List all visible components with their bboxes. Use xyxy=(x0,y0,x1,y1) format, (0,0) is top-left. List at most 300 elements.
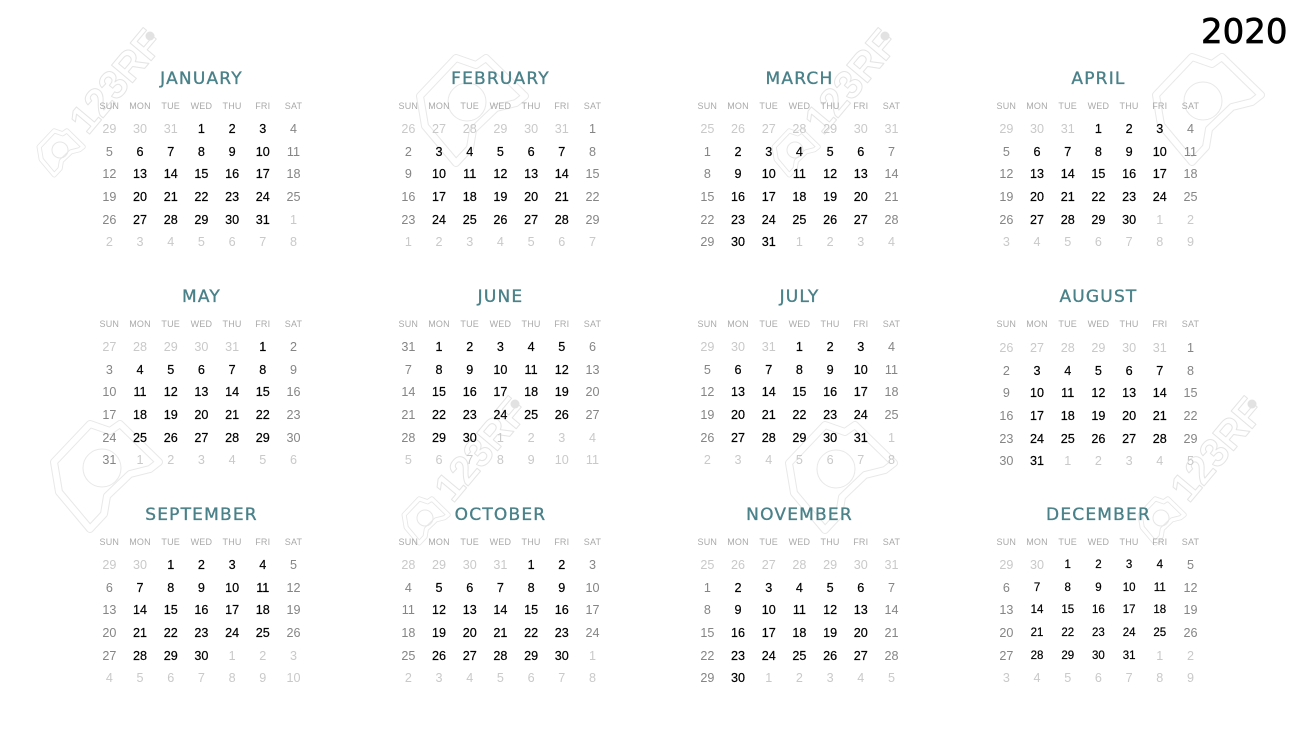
date grid: 2 xyxy=(827,340,834,354)
heading: december: DECEMBER xyxy=(1046,505,1151,525)
date grid: 29 xyxy=(700,340,714,354)
date grid: 2 xyxy=(1003,364,1010,378)
date grid: 5 xyxy=(1187,558,1194,572)
date grid: 7 xyxy=(259,235,266,249)
weekday labels xyxy=(698,319,900,329)
weekday labels: SAT xyxy=(285,101,302,111)
date grid: 10 xyxy=(432,167,446,181)
panel: may xyxy=(100,287,302,467)
date grid: 13 xyxy=(102,603,116,617)
date grid: 4 xyxy=(589,431,596,445)
weekday labels: SUN xyxy=(997,537,1016,547)
date grid: 2 xyxy=(259,649,266,663)
date grid: 6 xyxy=(198,363,205,377)
date grid: 30 xyxy=(225,213,239,227)
date grid: 31 xyxy=(493,558,507,572)
weekday labels: SAT xyxy=(883,319,900,329)
weekday labels: FRI xyxy=(1152,319,1167,329)
date grid: 5 xyxy=(704,363,711,377)
date grid: 31 xyxy=(762,235,776,249)
date grid: 25 xyxy=(792,213,806,227)
date grid: 29 xyxy=(1091,213,1105,227)
date grid: 16 xyxy=(225,167,239,181)
date grid: 27 xyxy=(854,213,868,227)
date grid: 16 xyxy=(1092,604,1105,616)
date grid: 7 xyxy=(1126,671,1133,685)
weekday labels: THU xyxy=(223,319,242,329)
date grid: 16 xyxy=(731,626,745,640)
date grid: 6 xyxy=(466,581,473,595)
weekday labels: TUE xyxy=(460,319,479,329)
date grid: 7 xyxy=(1064,145,1071,159)
weekday labels: MON xyxy=(1026,319,1048,329)
date grid: 8 xyxy=(198,145,205,159)
date grid: 31 xyxy=(884,558,898,572)
date grid: 9 xyxy=(735,603,742,617)
date grid: 4 xyxy=(167,235,174,249)
date grid xyxy=(999,558,1197,685)
date grid: 8 xyxy=(704,167,711,181)
date grid: 26 xyxy=(823,649,837,663)
date grid: 8 xyxy=(589,145,596,159)
date grid: 2 xyxy=(290,340,297,354)
date grid: 26 xyxy=(432,649,446,663)
date grid: 8 xyxy=(436,363,443,377)
weekday labels: WED xyxy=(191,101,212,111)
date grid: 1 xyxy=(528,558,535,572)
date grid: 8 xyxy=(259,363,266,377)
date grid: 30 xyxy=(1122,341,1136,355)
date grid: 6 xyxy=(558,235,565,249)
date grid: 2 xyxy=(827,235,834,249)
date grid: 5 xyxy=(1187,454,1194,468)
date grid: 23 xyxy=(286,408,300,422)
date grid: 27 xyxy=(1030,213,1044,227)
date grid xyxy=(401,340,599,467)
date grid xyxy=(102,340,300,467)
date grid: 4 xyxy=(137,363,144,377)
weekday labels: SAT xyxy=(584,537,601,547)
date grid: 24 xyxy=(225,626,239,640)
weekday labels: THU xyxy=(1120,319,1139,329)
panel: june xyxy=(399,287,601,467)
date grid: 13 xyxy=(1030,167,1044,181)
date grid: 8 xyxy=(796,363,803,377)
weekday labels: SAT xyxy=(584,319,601,329)
date grid: 2 xyxy=(735,581,742,595)
date grid: 6 xyxy=(589,340,596,354)
date grid: 29 xyxy=(1061,650,1074,662)
date grid: 17 xyxy=(1123,604,1135,616)
date grid: 5 xyxy=(290,558,297,572)
date grid: 13 xyxy=(731,385,745,399)
date grid: 21 xyxy=(762,408,776,422)
weekday labels xyxy=(100,319,302,329)
date grid: 4 xyxy=(796,145,803,159)
weekday labels: MON xyxy=(129,319,151,329)
panel: march xyxy=(698,69,900,249)
date grid: 8 xyxy=(589,671,596,685)
heading: july: JULY xyxy=(780,287,819,307)
date grid: 15 xyxy=(524,603,538,617)
date grid: 18 xyxy=(1183,167,1197,181)
date grid: 20 xyxy=(194,408,208,422)
date grid: 22 xyxy=(256,408,270,422)
date grid: 30 xyxy=(1122,213,1136,227)
weekday labels: FRI xyxy=(554,319,569,329)
weekday labels: WED xyxy=(191,319,212,329)
panel: july xyxy=(698,287,900,467)
date grid: 3 xyxy=(137,235,144,249)
date grid: 24 xyxy=(1153,190,1167,204)
date grid: 30 xyxy=(823,431,837,445)
date grid: 8 xyxy=(229,671,236,685)
date grid: 29 xyxy=(256,431,270,445)
date grid: 9 xyxy=(466,363,473,377)
date grid: 17 xyxy=(854,385,868,399)
date grid: 9 xyxy=(290,363,297,377)
date grid: 7 xyxy=(137,581,144,595)
weekday labels: THU xyxy=(1120,101,1139,111)
date grid xyxy=(700,122,898,249)
date grid: 20 xyxy=(1122,409,1136,423)
weekday labels: THU xyxy=(223,537,242,547)
weekday labels: MON xyxy=(727,537,749,547)
date grid: 2 xyxy=(436,235,443,249)
date grid: 4 xyxy=(106,671,113,685)
date grid: 15 xyxy=(256,385,270,399)
weekday labels: TUE xyxy=(460,101,479,111)
date grid: 13 xyxy=(585,363,599,377)
date grid: 3 xyxy=(106,363,113,377)
date grid: 1 xyxy=(497,431,504,445)
date grid: 10 xyxy=(762,167,776,181)
date grid: 6 xyxy=(1034,145,1041,159)
heading: september: SEPTEMBER xyxy=(145,505,258,525)
date grid: 5 xyxy=(1095,364,1102,378)
date grid: 18 xyxy=(1153,604,1166,616)
date grid: 1 xyxy=(1187,341,1194,355)
date grid: 1 xyxy=(229,649,236,663)
date grid: 28 xyxy=(1031,650,1043,662)
date grid: 30 xyxy=(1030,558,1044,572)
date grid: 29 xyxy=(524,649,538,663)
date grid: 11 xyxy=(287,145,300,159)
weekday labels: WED xyxy=(490,537,511,547)
weekday labels: TUE xyxy=(460,537,479,547)
date grid: 1 xyxy=(796,235,803,249)
date grid: 26 xyxy=(1091,432,1105,446)
date grid: 23 xyxy=(731,213,745,227)
date grid: 3 xyxy=(735,453,742,467)
date grid xyxy=(999,341,1197,468)
date grid: 17 xyxy=(585,603,599,617)
date grid: 7 xyxy=(405,363,412,377)
date grid: 31 xyxy=(854,431,868,445)
weekday labels: SUN xyxy=(100,537,119,547)
date grid: 2 xyxy=(558,558,565,572)
date grid: 5 xyxy=(497,671,504,685)
date grid: 27 xyxy=(762,122,776,136)
date grid: 23 xyxy=(194,626,208,640)
date grid: 21 xyxy=(225,408,239,422)
date grid: 11 xyxy=(586,453,599,467)
weekday labels: WED xyxy=(1088,537,1109,547)
date grid: 3 xyxy=(436,145,443,159)
weekday labels: TUE xyxy=(161,537,180,547)
date grid: 25 xyxy=(463,213,477,227)
date grid: 28 xyxy=(792,122,806,136)
date grid: 28 xyxy=(493,649,507,663)
date grid: 13 xyxy=(133,167,147,181)
date grid: 27 xyxy=(194,431,208,445)
date grid: 31 xyxy=(1123,650,1135,662)
date grid: 9 xyxy=(229,145,236,159)
year title: 2020 xyxy=(1201,12,1288,52)
weekday labels: SUN xyxy=(399,101,418,111)
date grid: 14 xyxy=(225,385,239,399)
date grid: 30 xyxy=(854,122,868,136)
date grid: 29 xyxy=(700,235,714,249)
weekday labels: SAT xyxy=(1182,101,1199,111)
date grid: 31 xyxy=(1061,122,1075,136)
weekday labels: FRI xyxy=(554,537,569,547)
date grid: 3 xyxy=(765,145,772,159)
date grid: 12 xyxy=(999,167,1013,181)
date grid: 5 xyxy=(405,453,412,467)
date grid: 28 xyxy=(1061,341,1075,355)
date grid: 8 xyxy=(1156,671,1163,685)
date grid: 27 xyxy=(524,213,538,227)
date grid: 1 xyxy=(259,340,266,354)
date grid: 23 xyxy=(999,432,1013,446)
date grid: 9 xyxy=(558,581,565,595)
date grid: 19 xyxy=(164,408,178,422)
date grid: 5 xyxy=(497,145,504,159)
date grid: 17 xyxy=(762,626,776,640)
weekday labels: MON xyxy=(1026,537,1048,547)
date grid: 28 xyxy=(133,649,147,663)
date grid: 14 xyxy=(1153,386,1167,400)
date grid: 5 xyxy=(558,340,565,354)
weekday labels: FRI xyxy=(853,101,868,111)
date grid: 24 xyxy=(585,626,599,640)
date grid: 3 xyxy=(1003,671,1010,685)
weekday labels: MON xyxy=(129,101,151,111)
date grid: 28 xyxy=(555,213,569,227)
weekday labels: SAT xyxy=(584,101,601,111)
date grid: 2 xyxy=(704,453,711,467)
weekday labels: SAT xyxy=(883,101,900,111)
panel: november xyxy=(698,505,900,685)
date grid: 22 xyxy=(194,190,208,204)
date grid: 4 xyxy=(497,235,504,249)
date grid: 25 xyxy=(286,190,300,204)
date grid: 3 xyxy=(436,671,443,685)
weekday labels: WED xyxy=(191,537,212,547)
date grid: 13 xyxy=(194,385,208,399)
heading: march: MARCH xyxy=(766,69,833,89)
weekday labels: SUN xyxy=(100,101,119,111)
date grid: 8 xyxy=(888,453,895,467)
date grid: 23 xyxy=(225,190,239,204)
date grid: 17 xyxy=(493,385,507,399)
date grid: 29 xyxy=(700,671,714,685)
date grid xyxy=(401,558,600,685)
date grid: 15 xyxy=(700,626,714,640)
date grid: 5 xyxy=(827,145,834,159)
weekday labels: TUE xyxy=(161,101,180,111)
weekday labels: TUE xyxy=(1058,319,1077,329)
watermark: small logo march: 123RF xyxy=(796,22,907,142)
heading: april: APRIL xyxy=(1071,69,1126,89)
date grid: 18 xyxy=(401,626,415,640)
date grid: 25 xyxy=(401,649,415,663)
date grid: 10 xyxy=(102,385,116,399)
date grid: 28 xyxy=(1061,213,1075,227)
weekday labels xyxy=(698,101,900,111)
date grid: 24 xyxy=(432,213,446,227)
date grid: 4 xyxy=(528,340,535,354)
date grid: 21 xyxy=(884,626,898,640)
date grid: 19 xyxy=(823,190,837,204)
date grid: 22 xyxy=(700,649,714,663)
date grid: 22 xyxy=(1061,627,1074,639)
date grid: 30 xyxy=(999,454,1013,468)
date grid: 22 xyxy=(585,190,599,204)
weekday labels: MON xyxy=(1026,101,1048,111)
watermark: small logo march xyxy=(774,22,907,175)
date grid: 21 xyxy=(1031,627,1043,639)
date grid: 19 xyxy=(493,190,507,204)
weekday labels: THU xyxy=(223,101,242,111)
weekday labels: FRI xyxy=(255,101,270,111)
date grid: 7 xyxy=(497,581,504,595)
date grid: 7 xyxy=(167,145,174,159)
date grid: 1 xyxy=(1156,649,1163,663)
date grid: 2 xyxy=(796,671,803,685)
date grid: 12 xyxy=(1091,386,1105,400)
date grid: 12 xyxy=(1183,581,1197,595)
date grid: 27 xyxy=(585,408,599,422)
date grid: 11 xyxy=(1061,386,1074,400)
date grid: 2 xyxy=(167,453,174,467)
heading: august: AUGUST xyxy=(1059,287,1138,307)
date grid: 16 xyxy=(999,409,1013,423)
date grid: 1 xyxy=(704,581,711,595)
date grid: 5 xyxy=(167,363,174,377)
date grid: 30 xyxy=(133,122,147,136)
date grid: 3 xyxy=(497,340,504,354)
date grid: 18 xyxy=(884,385,898,399)
weekday labels: SAT xyxy=(1182,537,1199,547)
date grid: 27 xyxy=(762,558,776,572)
date grid: 11 xyxy=(463,167,476,181)
date grid: 18 xyxy=(792,626,806,640)
date grid: 6 xyxy=(1095,671,1102,685)
weekday labels: THU xyxy=(522,101,541,111)
date grid: 29 xyxy=(102,122,116,136)
date grid: 3 xyxy=(558,431,565,445)
date grid: 1 xyxy=(765,671,772,685)
weekday labels xyxy=(399,101,601,111)
date grid: 1 xyxy=(589,649,596,663)
heading: november: NOVEMBER xyxy=(746,505,853,525)
date grid: 9 xyxy=(528,453,535,467)
date grid: 29 xyxy=(164,340,178,354)
date grid: 28 xyxy=(1153,432,1167,446)
date grid: 20 xyxy=(854,626,868,640)
weekday labels: SUN xyxy=(997,101,1016,111)
date grid: 1 xyxy=(1065,559,1071,571)
weekday labels: FRI xyxy=(554,101,569,111)
date grid: 3 xyxy=(857,340,864,354)
date grid: 9 xyxy=(259,671,266,685)
date grid: 1 xyxy=(167,558,174,572)
date grid: 6 xyxy=(167,671,174,685)
weekday labels: WED xyxy=(789,319,810,329)
date grid: 3 xyxy=(1156,122,1163,136)
date grid: 14 xyxy=(133,603,147,617)
date grid: 24 xyxy=(762,649,776,663)
date grid: 5 xyxy=(528,235,535,249)
weekday labels: SAT xyxy=(1182,319,1199,329)
date grid: 6 xyxy=(735,363,742,377)
date grid: 14 xyxy=(1061,167,1075,181)
date grid: 27 xyxy=(432,122,446,136)
date grid: 4 xyxy=(1157,559,1163,571)
date grid: 27 xyxy=(102,340,116,354)
date grid: 22 xyxy=(700,213,714,227)
date grid xyxy=(102,558,300,685)
date grid: 23 xyxy=(401,213,415,227)
date grid: 18 xyxy=(256,603,270,617)
date grid: 17 xyxy=(1153,167,1167,181)
date grid: 8 xyxy=(167,581,174,595)
date grid: 5 xyxy=(1003,145,1010,159)
weekday labels: THU xyxy=(821,319,840,329)
date grid: 11 xyxy=(885,363,898,377)
date grid: 18 xyxy=(792,190,806,204)
date grid: 16 xyxy=(463,385,477,399)
date grid: 11 xyxy=(1154,582,1166,594)
date grid: 2 xyxy=(735,145,742,159)
weekday labels: WED xyxy=(789,537,810,547)
date grid: 22 xyxy=(792,408,806,422)
date grid: 6 xyxy=(106,581,113,595)
date grid: 2 xyxy=(198,558,205,572)
date grid: 29 xyxy=(792,431,806,445)
date grid: 12 xyxy=(493,167,507,181)
date grid: 22 xyxy=(164,626,178,640)
date grid: 27 xyxy=(463,649,477,663)
date grid: 17 xyxy=(225,603,239,617)
date grid: 29 xyxy=(164,649,178,663)
date grid: 5 xyxy=(1064,235,1071,249)
date grid: 2 xyxy=(1187,213,1194,227)
watermark: large egg july xyxy=(789,425,894,530)
date grid: 21 xyxy=(1153,409,1167,423)
weekday labels: SAT xyxy=(285,537,302,547)
date grid: 20 xyxy=(731,408,745,422)
date grid: 30 xyxy=(1030,122,1044,136)
date grid: 26 xyxy=(731,122,745,136)
date grid: 23 xyxy=(731,649,745,663)
date grid: 27 xyxy=(1122,432,1136,446)
date grid: 29 xyxy=(493,122,507,136)
date grid: 23 xyxy=(555,626,569,640)
weekday labels xyxy=(399,319,601,329)
